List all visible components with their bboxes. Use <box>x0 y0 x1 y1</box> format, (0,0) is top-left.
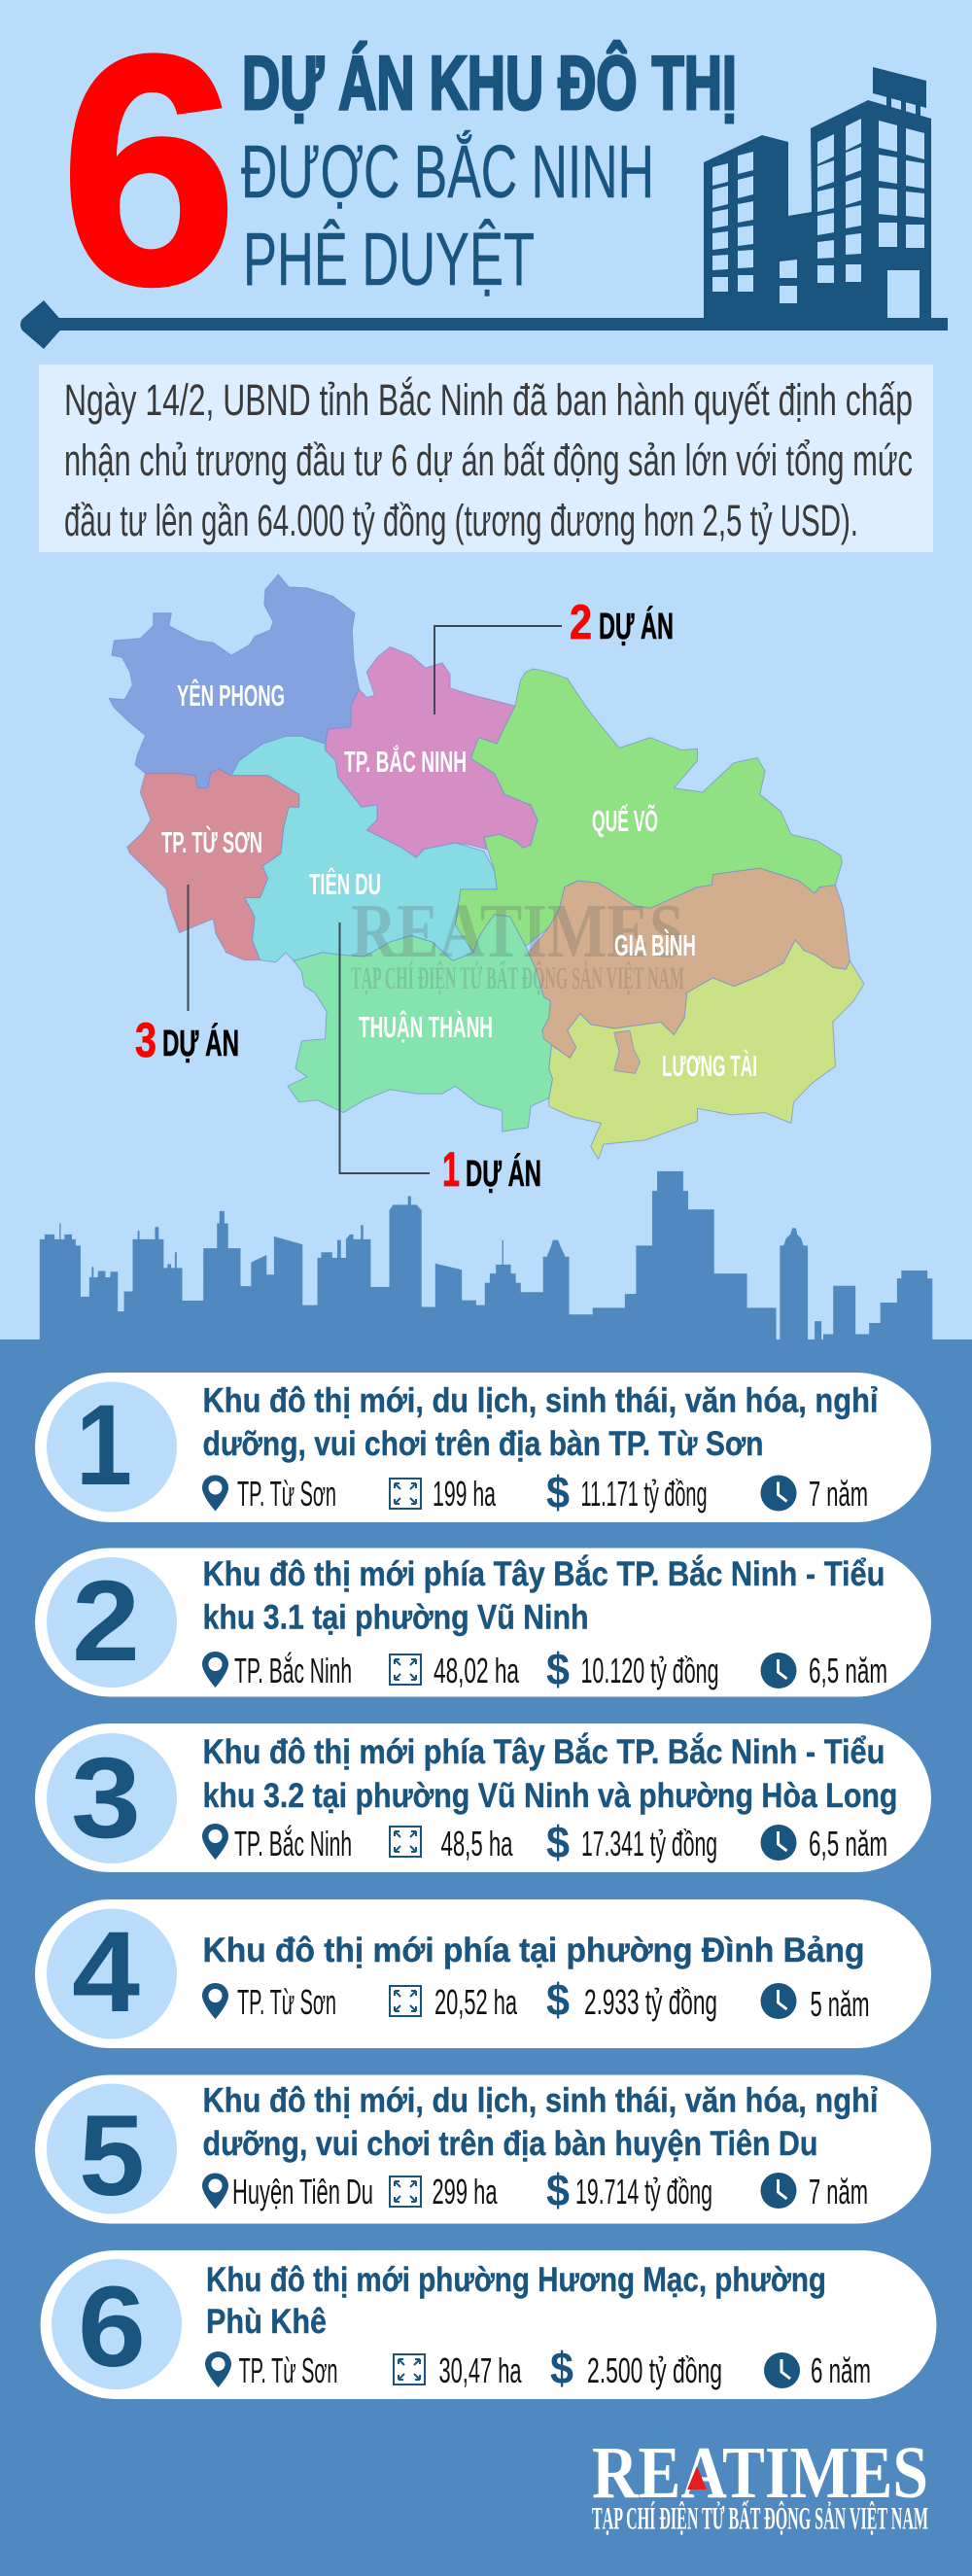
location <box>202 1474 336 1514</box>
number badge 6 <box>52 2259 182 2391</box>
location: Huyện Tiên Du <box>232 2172 373 2211</box>
number badge 2: 2 <box>72 1557 140 1686</box>
area <box>390 1824 513 1863</box>
area <box>394 2350 522 2390</box>
number badge 4 <box>47 1908 177 2039</box>
watermark: REATIMES <box>351 889 684 974</box>
region labels: QUẾ VÕ <box>592 803 658 838</box>
card background <box>35 2074 931 2224</box>
area <box>390 1982 518 2022</box>
project card 6 <box>41 2250 937 2399</box>
project title: Khu đô thị mới phía Tây Bắc TP. Bắc Ninh - Tiểu <box>202 1554 885 1593</box>
location <box>202 1824 352 1863</box>
card background <box>35 1548 931 1697</box>
project title <box>202 1554 885 1637</box>
callout: 3 projects: DỰ ÁN <box>162 1022 239 1064</box>
callout: 3 projects: 3 <box>135 1013 156 1067</box>
region labels: THUẬN THÀNH <box>359 1009 493 1044</box>
project title: Khu đô thị mới, du lịch, sinh thái, văn hóa, nghỉ <box>202 1382 879 1419</box>
area: 30,47 ha <box>439 2350 522 2390</box>
area: 299 ha <box>432 2172 498 2211</box>
region labels: YÊN PHONG <box>177 678 285 713</box>
callout: 2 projects <box>434 595 674 714</box>
project title <box>206 2261 826 2341</box>
investment: 10.120 tỷ đồng <box>581 1651 719 1690</box>
region shapes <box>109 574 864 1159</box>
map of Bac Ninh districts <box>109 574 864 1159</box>
callout: 1 project <box>340 922 541 1197</box>
duration: 7 năm <box>809 2172 868 2211</box>
project title: Khu đô thị mới phía tại phường Đình Bảng <box>202 1932 865 1969</box>
project title <box>202 2082 879 2163</box>
area <box>390 1474 497 1514</box>
project title: Khu đô thị mới phường Hương Mạc, phường <box>206 2261 826 2299</box>
title line 2: ĐƯỢC BẮC NINH <box>241 129 654 214</box>
location <box>202 1651 352 1690</box>
watermark <box>351 889 684 996</box>
callout: 3 projects <box>135 885 239 1067</box>
investment: 17.341 tỷ đồng <box>581 1824 717 1863</box>
area: 48,5 ha <box>441 1824 513 1863</box>
duration: 5 năm <box>811 1984 869 2024</box>
duration: 6 năm <box>811 2350 871 2390</box>
area: 20,52 ha <box>434 1982 518 2022</box>
investment <box>546 2165 712 2215</box>
project title: Khu đô thị mới, du lịch, sinh thái, văn hóa, nghỉ <box>202 2082 879 2119</box>
number badge 3 <box>47 1733 177 1863</box>
location: TP. Bắc Ninh <box>234 1651 352 1690</box>
project title <box>202 1732 898 1815</box>
region labels <box>161 678 757 1083</box>
callout: 2 projects: 2 <box>570 595 592 649</box>
project card 4 <box>35 1899 931 2048</box>
number badge 5 <box>47 2084 177 2220</box>
duration: 6,5 năm <box>809 1824 887 1863</box>
icon: office buildings <box>704 67 931 319</box>
duration <box>760 1824 887 1863</box>
lower section background <box>0 1340 972 2576</box>
project card 5 <box>35 2074 931 2224</box>
card background <box>41 2250 937 2399</box>
investment: 2.933 tỷ đồng <box>584 1982 717 2022</box>
investment: $ <box>546 1644 570 1694</box>
region labels: LƯƠNG TÀI <box>662 1049 757 1083</box>
duration <box>764 2350 871 2390</box>
project title: khu 3.1 tại phường Vũ Ninh <box>202 1598 589 1637</box>
duration <box>760 1983 869 2024</box>
region labels: GIA BÌNH <box>614 928 696 962</box>
region labels: TP. TỪ SƠN <box>161 824 262 859</box>
number badge 1: 1 <box>76 1381 132 1510</box>
number badge 4: 4 <box>72 1908 140 2036</box>
location <box>202 2172 373 2211</box>
number badge 2 <box>47 1557 177 1688</box>
location: TP. Từ Sơn <box>237 1982 336 2022</box>
title <box>60 0 737 353</box>
card background <box>35 1899 931 2048</box>
project title <box>202 1382 879 1463</box>
investment: $ <box>546 1817 570 1867</box>
location: TP. Từ Sơn <box>239 2350 338 2390</box>
investment <box>550 2343 722 2393</box>
number badge 1 <box>47 1381 177 1513</box>
investment: $ <box>546 1467 570 1517</box>
city skyline <box>40 1171 932 1340</box>
header baseline with diamond <box>20 300 948 349</box>
investment: 2.500 tỷ đồng <box>587 2350 722 2390</box>
investment: 11.171 tỷ đồng <box>581 1474 708 1514</box>
logo: Reatimes: REATIMES <box>592 2432 928 2514</box>
project title: Khu đô thị mới phía Tây Bắc TP. Bắc Ninh - Tiểu <box>202 1732 885 1771</box>
project card 2 <box>35 1548 931 1697</box>
investment: 19.714 tỷ đồng <box>575 2172 712 2211</box>
number badge 5: 5 <box>79 2092 145 2220</box>
location <box>205 2350 338 2390</box>
number badge 6: 6 <box>78 2263 146 2391</box>
duration <box>760 1474 868 1514</box>
card background <box>35 1723 931 1872</box>
callout: 2 projects: DỰ ÁN <box>599 605 674 647</box>
duration: 7 năm <box>809 1474 868 1514</box>
investment <box>546 1974 717 2025</box>
region labels: TIÊN DU <box>309 866 381 901</box>
project card 3 <box>35 1723 931 1872</box>
location: TP. Bắc Ninh <box>234 1824 352 1863</box>
investment: $ <box>546 2165 570 2215</box>
number badge 3: 3 <box>71 1734 141 1862</box>
investment <box>546 1644 719 1694</box>
intro text panel <box>39 365 933 552</box>
callout: 1 project: DỰ ÁN <box>466 1152 541 1195</box>
area <box>390 2172 498 2211</box>
duration: 6,5 năm <box>809 1651 887 1690</box>
project title: dưỡng, vui chơi trên địa bàn TP. Từ Sơn <box>202 1425 764 1463</box>
duration <box>760 1651 887 1690</box>
location <box>202 1982 336 2022</box>
area <box>390 1651 520 1690</box>
location: TP. Từ Sơn <box>237 1474 336 1514</box>
project title: dưỡng, vui chơi trên địa bàn huyện Tiên Du <box>202 2125 818 2163</box>
region labels: TP. BẮC NINH <box>344 744 467 779</box>
title line 3: PHÊ DUYỆT <box>243 218 535 301</box>
callout: 1 project: 1 <box>442 1142 460 1197</box>
project card 1 <box>35 1373 931 1522</box>
investment: $ <box>546 1974 570 2025</box>
project title: Phù Khê <box>206 2303 327 2341</box>
investment: $ <box>550 2343 573 2393</box>
investment <box>546 1817 717 1867</box>
investment <box>546 1467 708 1517</box>
area: 48,02 ha <box>434 1651 520 1690</box>
duration <box>760 2172 868 2211</box>
area: 199 ha <box>433 1474 497 1514</box>
title line 1: DỰ ÁN KHU ĐÔ THỊ <box>242 40 737 125</box>
card background <box>35 1373 931 1522</box>
